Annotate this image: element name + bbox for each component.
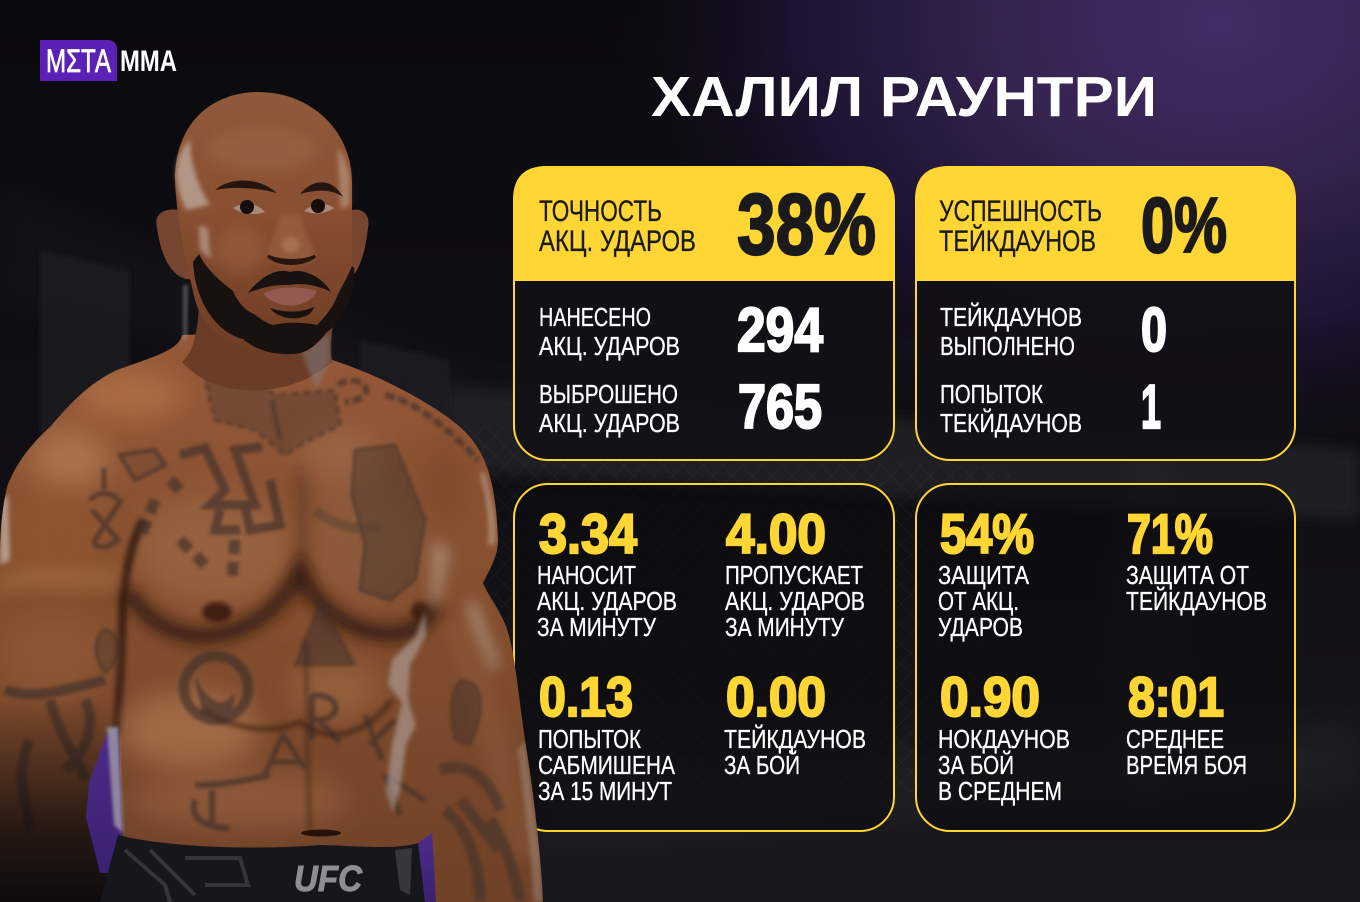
- tattoo: shoulder ribbon: [90, 468, 120, 547]
- thrown label: АКЦ. УДАРОВ: [539, 408, 680, 438]
- tattoo: pagoda: [295, 600, 355, 665]
- landed label: [539, 302, 680, 361]
- stat: takedowns per fight: 0.00: [726, 665, 826, 728]
- stat: landed per minute: НАНОСИТ: [537, 560, 636, 590]
- tattoo: letters: [194, 775, 270, 828]
- gap between left arm and torso: [86, 727, 123, 873]
- header label: ТЕЙКДАУНОВ: [939, 224, 1096, 258]
- head: [156, 92, 369, 354]
- tattoo: right chest eagle: [352, 445, 425, 600]
- brows: [215, 181, 343, 197]
- ears: [156, 209, 369, 279]
- stat: strike defence: ЗАЩИТА: [938, 560, 1030, 590]
- attempts label: ПОПЫТОК: [940, 379, 1043, 409]
- stat: strike defence: [938, 502, 1034, 642]
- stat: absorbed per minute: АКЦ. УДАРОВ: [725, 586, 865, 616]
- tattoo: left arm figure: [96, 630, 118, 672]
- stat: takedown defence: ТЕЙКДАУНОВ: [1126, 586, 1267, 616]
- stat: submission attempts: [538, 665, 676, 806]
- tattoo: chest LA emblem: [180, 447, 280, 530]
- stat: average fight time: [1126, 665, 1247, 780]
- stat: submission attempts: САБМИШЕНА: [538, 750, 676, 780]
- attempts value: 1: [1141, 373, 1161, 442]
- UFC logo: UFC: [294, 858, 363, 899]
- nose: [268, 215, 315, 266]
- stat: absorbed per minute: [725, 502, 865, 642]
- nipples: [202, 602, 232, 622]
- gap between right arm and torso: [386, 610, 436, 902]
- tattoo: face medallion: [184, 656, 248, 720]
- stat: takedowns per fight: ТЕЙКДАУНОВ: [724, 724, 866, 754]
- skull highlights: [176, 140, 210, 210]
- eyes: [233, 204, 334, 214]
- header label: [939, 195, 1102, 258]
- header label: ТОЧНОСТЬ: [539, 195, 662, 228]
- moustache: [248, 271, 331, 293]
- stat: strike defence: 54%: [940, 502, 1034, 565]
- stat: knockdowns: [938, 665, 1070, 806]
- header label: [539, 195, 696, 258]
- title: ХАЛИЛ РАУНТРИ: [651, 65, 1157, 129]
- stat: absorbed per minute: ПРОПУСКАЕТ: [725, 560, 863, 590]
- attempts label: ТЕКЙДАУНОВ: [940, 408, 1082, 438]
- stat: knockdowns: 0.90: [940, 665, 1040, 728]
- tattoo: collar script: [338, 381, 478, 460]
- stat: takedown defence: [1126, 502, 1267, 616]
- pec and arm shadows: [127, 570, 436, 636]
- beard: [193, 254, 354, 354]
- stat: landed per minute: АКЦ. УДАРОВ: [537, 586, 677, 616]
- torso and arms: [0, 330, 550, 902]
- stat: strike defence: УДАРОВ: [938, 612, 1023, 642]
- stat: absorbed per minute: 4.00: [726, 502, 826, 565]
- navel: [301, 830, 341, 836]
- thrown label: [539, 379, 680, 438]
- stat: knockdowns: ЗА БОЙ: [938, 750, 1014, 780]
- landed label: НАНЕСЕНО: [539, 302, 651, 332]
- success value: 0%: [1141, 181, 1227, 269]
- logo: META MMA: [40, 40, 177, 81]
- completed value: 0: [1141, 296, 1167, 365]
- stat: knockdowns: В СРЕДНЕМ: [938, 776, 1062, 806]
- stat: takedowns per fight: [724, 665, 866, 780]
- tattoo: right forearm: [451, 680, 481, 745]
- panel: defence and averages: [916, 484, 1295, 831]
- completed label: ВЫПОЛНЕНО: [940, 331, 1075, 361]
- attempts label: [940, 379, 1082, 438]
- stat: average fight time: СРЕДНЕЕ: [1126, 724, 1224, 754]
- arm fade: [0, 700, 120, 902]
- thrown value: 765: [738, 373, 822, 442]
- landed value: 294: [737, 296, 823, 365]
- neck highlight: [302, 332, 330, 390]
- panel: striking accuracy: [513, 166, 894, 460]
- logo: META MMA: MMA: [120, 45, 177, 78]
- stat: landed per minute: 3.34: [539, 502, 637, 565]
- tattoo: neck pattern: [205, 370, 340, 455]
- stat: average fight time: ВРЕМЯ БОЯ: [1126, 750, 1247, 780]
- soul patch: [270, 307, 314, 318]
- fighter photo illustration: [0, 92, 550, 902]
- neck: [182, 285, 340, 390]
- yellow header: [915, 166, 1296, 281]
- shorts: [100, 835, 425, 902]
- landed label: АКЦ. УДАРОВ: [539, 331, 680, 361]
- stat: strike defence: ОТ АКЦ.: [938, 586, 1019, 616]
- yellow header: [513, 166, 894, 281]
- stat: landed per minute: [537, 502, 677, 642]
- stat: submission attempts: ЗА 15 МИНУТ: [538, 776, 672, 806]
- stat: submission attempts: ПОПЫТОК: [538, 724, 641, 754]
- stat: takedown defence: ЗАЩИТА ОТ: [1126, 560, 1249, 590]
- lips: [263, 287, 317, 306]
- tattoos: [5, 370, 520, 900]
- stat: knockdowns: НОКДАУНОВ: [938, 724, 1070, 754]
- header label: УСПЕШНОСТЬ: [939, 195, 1102, 228]
- stat: landed per minute: ЗА МИНУТУ: [537, 612, 656, 642]
- stat: absorbed per minute: ЗА МИНУТУ: [725, 612, 844, 642]
- completed label: ТЕЙКДАУНОВ: [940, 302, 1082, 332]
- completed label: [940, 302, 1082, 361]
- stat: takedown defence: 71%: [1127, 502, 1213, 565]
- stat: average fight time: 8:01: [1128, 665, 1224, 728]
- edge highlights: [466, 600, 500, 670]
- accuracy value: 38%: [737, 177, 876, 273]
- thrown label: ВЫБРОШЕНО: [539, 379, 678, 409]
- logo: META MMA: МΣТА: [46, 43, 111, 79]
- panel: takedown success: [915, 166, 1296, 460]
- stat: submission attempts: 0.13: [539, 665, 633, 728]
- panel: strikes and submissions: [514, 484, 894, 831]
- header label: АКЦ. УДАРОВ: [539, 225, 696, 258]
- stat: takedowns per fight: ЗА БОЙ: [724, 750, 800, 780]
